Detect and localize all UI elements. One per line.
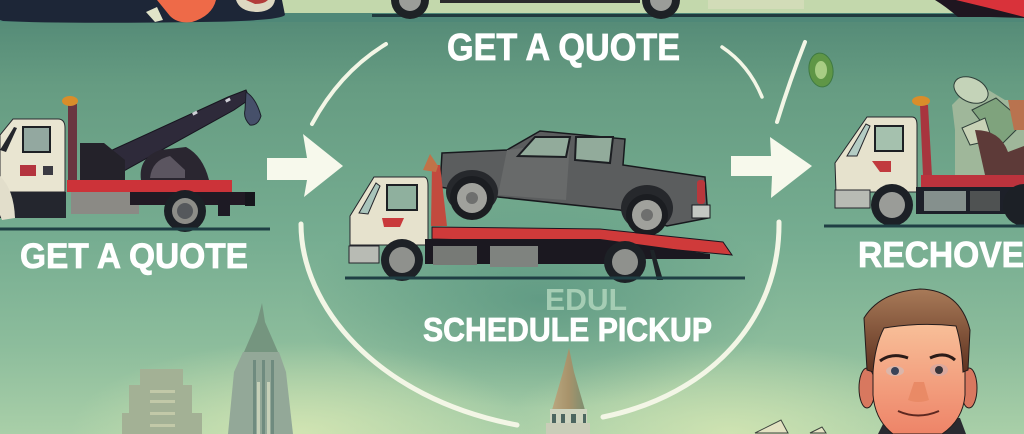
cab <box>0 119 65 192</box>
cropped figure at top left <box>0 0 285 23</box>
church spire <box>546 348 590 434</box>
ears <box>859 368 875 408</box>
beacon post <box>920 105 932 176</box>
cycle arcs <box>301 42 805 425</box>
cropped red bed at top right <box>935 0 1024 18</box>
chassis <box>0 192 66 218</box>
red deck <box>67 180 232 192</box>
windows <box>518 137 570 157</box>
heading: get a quote left: GET A QUOTE <box>20 237 248 276</box>
eyes <box>886 366 904 376</box>
face <box>873 320 965 434</box>
floating banknote icon <box>807 51 835 89</box>
wheel arches <box>446 170 498 214</box>
cropped truck at top centre <box>372 0 972 19</box>
wheel <box>164 190 206 232</box>
heading: schedule pickup: SCHEDULE PICKUP <box>423 311 712 348</box>
chassis <box>921 175 1024 187</box>
wheels <box>381 239 423 281</box>
beacon post <box>68 104 77 180</box>
skyline <box>122 303 590 434</box>
faint text: edul: EDUL <box>545 282 627 317</box>
wheel <box>871 184 913 226</box>
arrow 1 <box>267 134 343 197</box>
wheels <box>450 176 494 220</box>
cab <box>350 177 428 245</box>
mouth <box>898 411 939 416</box>
tow mast <box>431 165 447 226</box>
tower centre left <box>228 303 293 434</box>
banknotes near portrait <box>755 420 826 433</box>
shirt <box>878 418 966 434</box>
brows <box>880 355 955 361</box>
top band of cropped scene <box>0 0 1024 23</box>
cab <box>835 117 917 192</box>
ground line 3 <box>824 224 1024 228</box>
money pile <box>950 72 1024 175</box>
truck 3: carrying money, right <box>835 72 1024 226</box>
portrait of man <box>859 289 977 434</box>
pickup body <box>440 131 708 226</box>
wreck load <box>141 147 209 180</box>
bed <box>432 227 732 255</box>
hair <box>864 289 970 372</box>
ground line 1 <box>0 228 270 230</box>
heading: get a quote top: GET A QUOTE <box>447 27 680 69</box>
boom <box>108 90 250 172</box>
nose <box>908 382 929 402</box>
truck 2: flatbed carrying pickup, centre <box>349 131 732 283</box>
truck 1: tow truck, left <box>0 90 261 232</box>
ground line 2 <box>345 276 745 280</box>
building left <box>122 369 202 434</box>
lights and bumper <box>697 180 705 204</box>
hook <box>245 92 261 125</box>
arrow 2 <box>731 137 812 198</box>
